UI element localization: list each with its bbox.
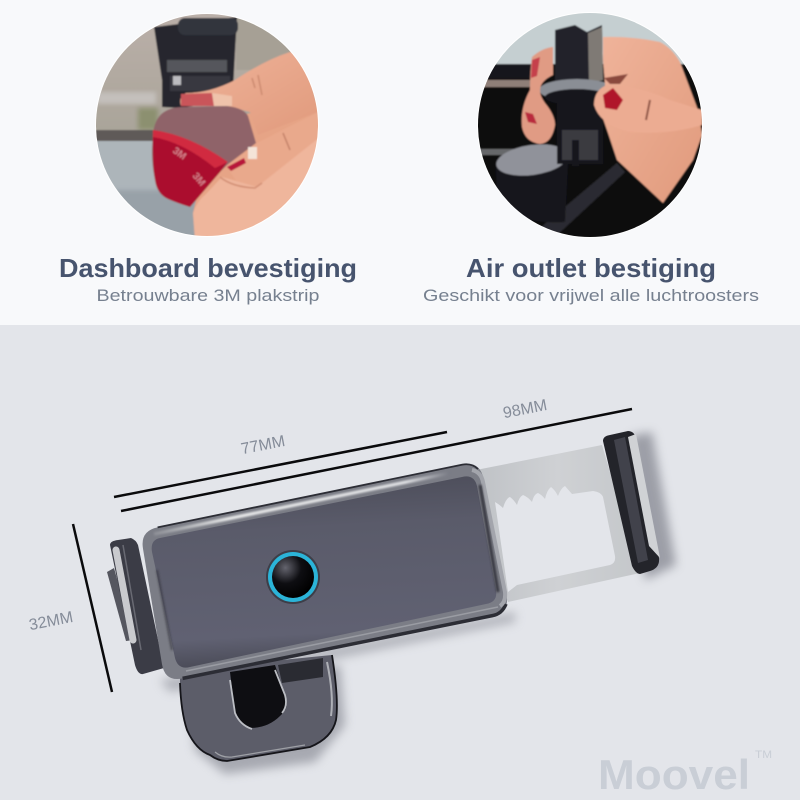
subtitle: dashboard: Betrouwbare 3M plakstrip — [96, 286, 320, 305]
upper finger — [179, 52, 316, 114]
extension slider with teeth — [476, 445, 640, 602]
dimension: 77MM: 77MM — [240, 433, 287, 458]
mounting foot — [180, 655, 337, 761]
left fingers — [522, 47, 555, 144]
subtitle: air outlet: Geschikt voor vrijwel alle luchtroosters — [423, 286, 759, 305]
dimension: 98MM — [121, 397, 632, 511]
main body — [143, 464, 507, 679]
brand logo: Moovel — [598, 751, 750, 798]
vent clip — [557, 98, 603, 164]
heading: air outlet: Air outlet bestiging — [466, 253, 716, 283]
photo: dashboard mounting: 3M — [190, 171, 207, 189]
left grip — [107, 538, 164, 674]
button with blue ring — [266, 550, 320, 604]
thumb nail — [227, 158, 246, 171]
right hand — [600, 37, 702, 203]
palm — [193, 137, 320, 240]
right grip — [603, 431, 660, 574]
photo: air outlet mounting — [478, 13, 702, 237]
hand base fill — [192, 101, 316, 212]
dimension: 77MM — [114, 432, 447, 497]
photo: dashboard mounting: 3M — [170, 145, 188, 162]
lower finger — [227, 112, 320, 187]
dimension: 98MM: 98MM — [502, 397, 549, 422]
brand logo: TM — [755, 749, 772, 761]
dimension: 32MM — [28, 524, 112, 692]
photo: dashboard mounting — [96, 14, 318, 236]
foot slot — [230, 665, 287, 728]
adhesive plate — [152, 106, 256, 207]
phone holder product — [107, 431, 676, 774]
heading: dashboard: Dashboard bevestiging — [59, 253, 357, 283]
dimension: 32MM: 32MM — [28, 609, 75, 634]
